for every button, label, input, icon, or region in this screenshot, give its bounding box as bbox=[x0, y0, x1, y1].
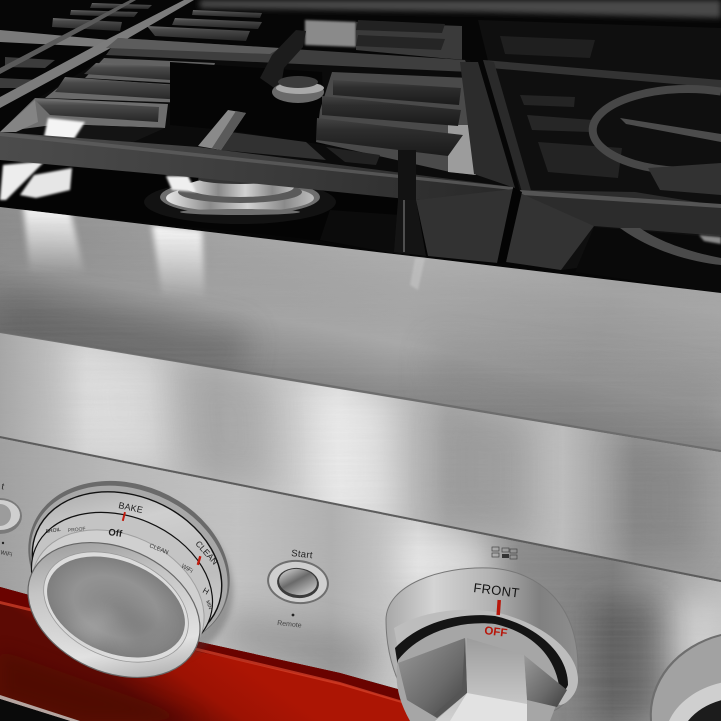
front ring bbox=[7, 517, 221, 703]
ridge highlight bbox=[0, 330, 721, 452]
center well bbox=[221, 132, 326, 160]
dial lower band bbox=[9, 486, 235, 684]
stainless top surface bbox=[0, 200, 721, 460]
off label: OFF bbox=[484, 625, 508, 640]
right grate front bar bbox=[520, 190, 721, 236]
left grate side rail bbox=[460, 62, 515, 188]
red enamel oven door bbox=[0, 587, 436, 721]
start button bbox=[265, 548, 331, 630]
knob skirt bbox=[386, 568, 578, 712]
stem finger bbox=[198, 110, 246, 150]
skirt lower ring bbox=[394, 610, 578, 705]
right grate ring bbox=[593, 89, 721, 195]
rear crossbar bbox=[106, 38, 470, 72]
lower reflections bbox=[0, 161, 45, 200]
knob shadow bbox=[11, 465, 259, 695]
right grate bbox=[478, 20, 721, 270]
right burner bbox=[575, 227, 721, 293]
knob well bbox=[395, 615, 568, 695]
dial labels: CLEAN bbox=[194, 539, 220, 567]
cooktop: gas burners and cast iron grates bbox=[0, 0, 721, 293]
left wing bbox=[398, 638, 467, 718]
left grate well bbox=[0, 38, 515, 187]
outer bezel bbox=[2, 451, 256, 679]
dial labels: BAKE bbox=[118, 500, 144, 515]
left grate fingers bbox=[84, 63, 202, 82]
stainless front face bbox=[0, 330, 721, 590]
burner head bbox=[272, 76, 324, 103]
handle bbox=[435, 638, 527, 721]
left rear crossbar bbox=[0, 30, 110, 47]
surface small flare bbox=[410, 258, 425, 290]
control panel bbox=[0, 430, 721, 721]
door bottom edge bbox=[0, 695, 80, 721]
dial labels: WiFi bbox=[180, 564, 193, 575]
reflections bbox=[44, 118, 85, 142]
front label: FRONT bbox=[473, 580, 520, 601]
left push button, partly cropped: t bbox=[1, 481, 6, 492]
dial labels: Off bbox=[108, 527, 124, 540]
left grate front leg bbox=[416, 189, 513, 263]
right fingers plate bbox=[316, 72, 476, 175]
remote label: Remote bbox=[277, 620, 302, 630]
burner position icon bbox=[492, 547, 517, 559]
left wells bbox=[85, 58, 215, 85]
knob inner body bbox=[396, 623, 560, 721]
dial upper band bbox=[8, 464, 246, 676]
burner dark bbox=[170, 62, 325, 145]
start label: Start bbox=[291, 548, 313, 561]
cooktop plate reflection bbox=[305, 20, 356, 47]
dial labels: PROOF bbox=[68, 526, 86, 534]
dial labels bbox=[45, 500, 220, 611]
left grate front bar bbox=[0, 132, 513, 200]
lower burner zone bbox=[0, 158, 428, 256]
dial labels: MIN bbox=[204, 600, 213, 611]
back wall bbox=[200, 0, 721, 18]
metal disc bbox=[32, 537, 200, 677]
right grate leg bbox=[506, 193, 594, 270]
knurled ring bbox=[9, 503, 227, 697]
red pointer bbox=[496, 600, 501, 615]
grate divider bbox=[497, 188, 522, 263]
lower burner bbox=[144, 174, 410, 256]
side rails bbox=[0, 0, 194, 108]
oven selector knob bbox=[2, 451, 259, 703]
right fingers bbox=[333, 80, 461, 105]
dial labels: H bbox=[201, 586, 211, 597]
back grate fingers bbox=[52, 3, 445, 50]
left grate leg reflection bbox=[398, 150, 416, 200]
burner arm bbox=[260, 30, 306, 92]
left push button, partly cropped bbox=[0, 481, 22, 558]
dial labels: BROIL bbox=[45, 527, 61, 535]
surface reflections bbox=[0, 200, 721, 460]
front burner knob bbox=[386, 568, 578, 721]
dial labels: CLEAN bbox=[148, 543, 169, 556]
right wing bbox=[524, 655, 567, 707]
third knob, partly cropped bbox=[650, 634, 721, 721]
